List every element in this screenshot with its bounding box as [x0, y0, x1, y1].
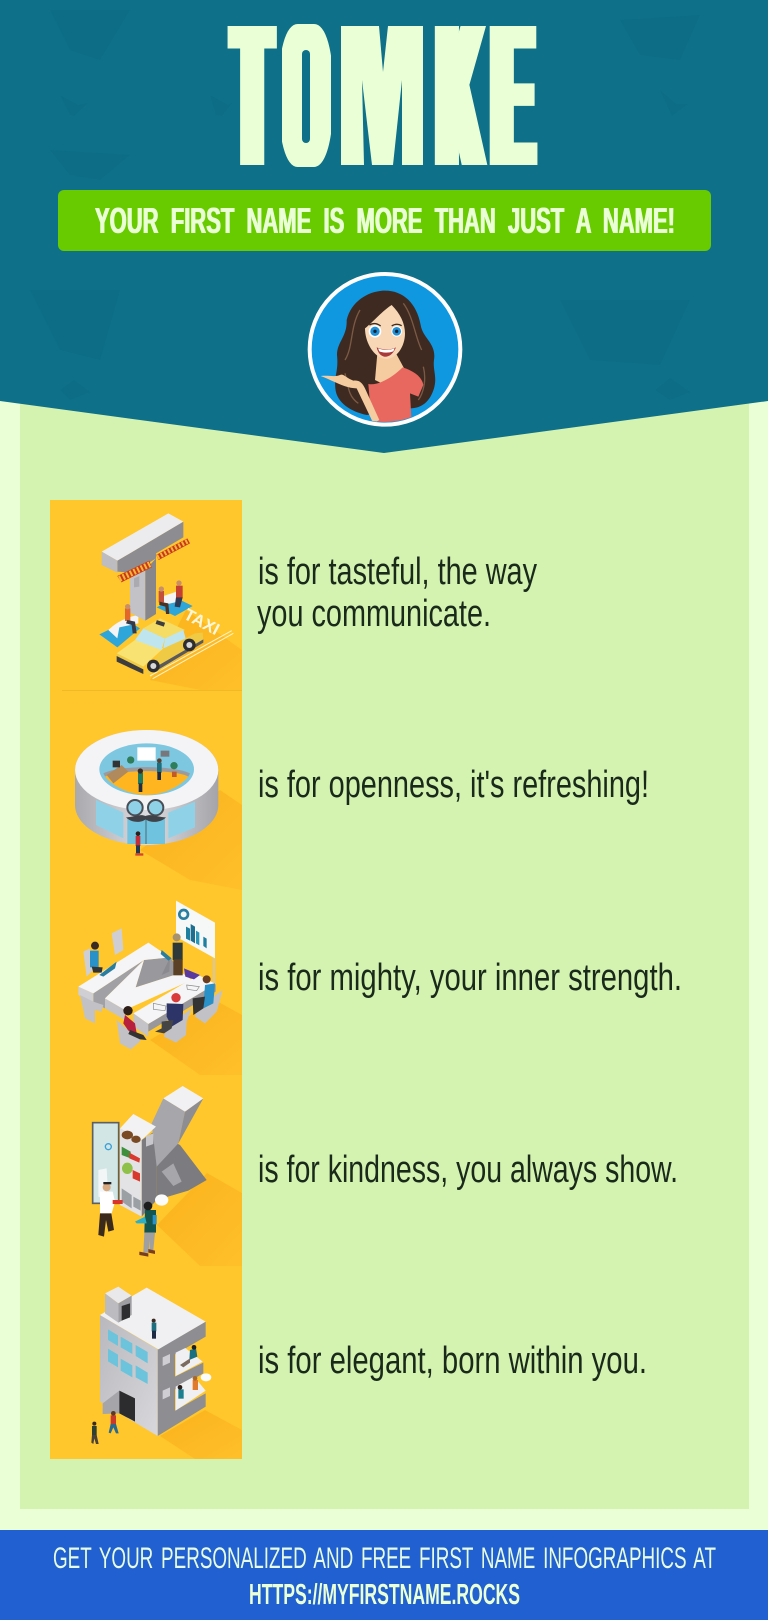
- neck: [375, 354, 404, 382]
- awnings: [117, 561, 152, 582]
- right faces: [158, 1322, 206, 1436]
- left face: [100, 1315, 158, 1436]
- chef: [100, 1192, 115, 1213]
- roof box: [105, 1287, 132, 1303]
- arm and hand: [321, 375, 379, 423]
- text: O line: is for openness, it's refreshing!: [258, 764, 649, 806]
- text: T line: [257, 551, 537, 635]
- footer: [0, 1530, 768, 1620]
- roof: [100, 1288, 206, 1349]
- text: E line: is for elegant, born within you.: [258, 1340, 647, 1382]
- icon: avatar portrait: [310, 274, 460, 425]
- icon: letter O optician ring: [75, 730, 218, 856]
- entrance: [103, 1391, 119, 1414]
- fridge body: [120, 1114, 156, 1140]
- balconies: [176, 1348, 203, 1376]
- ground markings: [99, 621, 140, 647]
- icon: letter M meeting table: [78, 901, 223, 1049]
- side vents: [163, 1354, 170, 1366]
- header banner: [0, 0, 768, 453]
- whiteboard: [176, 901, 215, 958]
- fridge door: [93, 1123, 119, 1203]
- speech bubble: [155, 1194, 168, 1206]
- table extension: [133, 975, 216, 1024]
- eyes: [369, 325, 381, 338]
- shirt: [368, 367, 423, 423]
- icon: K people talking: [98, 1182, 168, 1257]
- person: [136, 836, 140, 846]
- people: [125, 608, 130, 621]
- taxi label: TAXI: [181, 605, 223, 639]
- windows: [108, 1329, 148, 1384]
- back chairs: [112, 928, 123, 955]
- taxi: [145, 633, 203, 674]
- mouth: [377, 347, 396, 357]
- icon: letter T taxi stand: [99, 513, 233, 679]
- tagline banner: [58, 190, 711, 251]
- panel: content area: [20, 390, 749, 1509]
- customer: [144, 1210, 156, 1233]
- text: T line: you communicate.: [257, 593, 491, 635]
- outer wall: [75, 730, 218, 845]
- text: T line: is for tasteful, the way: [258, 551, 537, 593]
- glasses and moustache: [127, 800, 143, 815]
- illustration shadows: [140, 610, 242, 1459]
- people: [152, 1323, 156, 1331]
- letter M table: [136, 957, 182, 987]
- front chairs: [80, 995, 103, 1023]
- ring top surface: [75, 730, 218, 810]
- letter K: [157, 1133, 207, 1200]
- face: [365, 305, 405, 359]
- shelves: [122, 1131, 133, 1139]
- panel: yellow illustration column: [50, 500, 242, 1459]
- windows and door: [96, 800, 123, 838]
- icon: letter E building: [91, 1287, 211, 1444]
- icon: letter K fridge: [93, 1086, 207, 1217]
- letter T: [130, 570, 145, 621]
- hair: [335, 291, 435, 415]
- footer url: HTTPS://MYFIRSTNAME.ROCKS: [249, 1579, 520, 1611]
- ring interior: [99, 743, 194, 795]
- people: [90, 951, 99, 967]
